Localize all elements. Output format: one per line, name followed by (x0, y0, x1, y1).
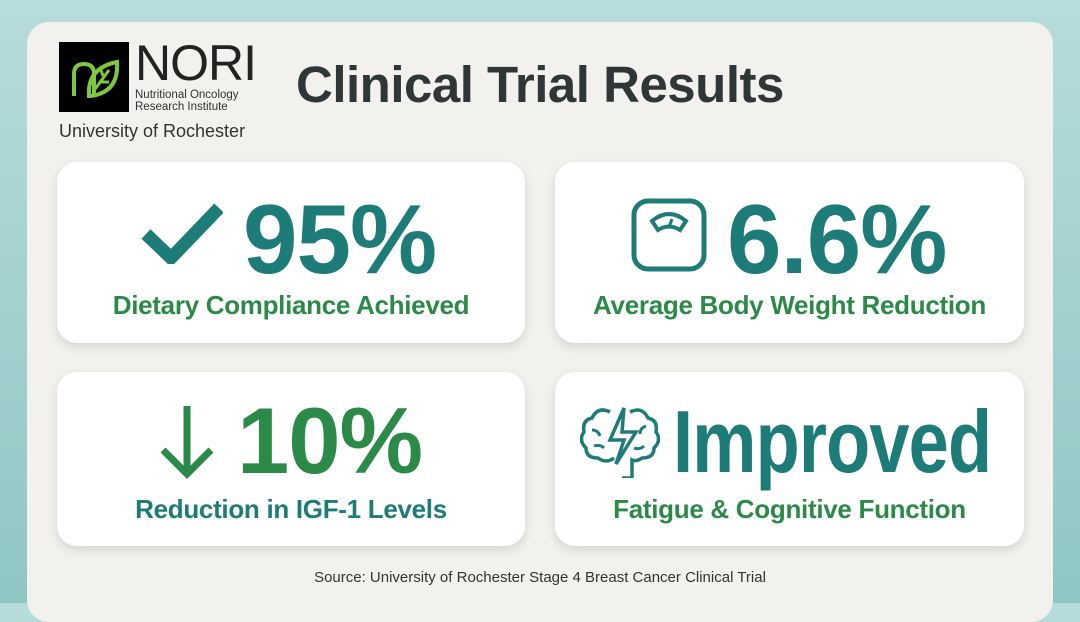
card: weight (555, 162, 1024, 343)
label: Dietary Compliance Achieved (113, 290, 469, 320)
stat: 6.6% (727, 184, 946, 294)
card: fatigue (555, 372, 1024, 546)
icon: brain with bolt (580, 407, 660, 478)
icon: leaf logo (59, 42, 129, 112)
source: Source: University of Rochester Stage 4 Breast Cancer Clinical Trial (314, 569, 766, 586)
logo text: NORI (135, 35, 256, 91)
stat: 95% (243, 184, 436, 294)
stat: 10% (237, 388, 422, 493)
label: Fatigue & Cognitive Function (613, 494, 966, 524)
title: Clinical Trial Results (296, 56, 784, 113)
logo: University of Rochester (59, 121, 245, 141)
card: compliance (57, 162, 525, 343)
icon: scale (632, 198, 706, 272)
stat: Improved (673, 392, 991, 491)
icon: down arrow (160, 406, 214, 479)
label: Reduction in IGF-1 Levels (135, 494, 447, 524)
icon: check (142, 204, 223, 264)
logo: Nutritional Oncology (135, 89, 239, 101)
label: Average Body Weight Reduction (593, 290, 986, 320)
logo: Research Institute (135, 101, 228, 113)
logo (59, 35, 256, 141)
card: IGF-1 (57, 372, 525, 546)
